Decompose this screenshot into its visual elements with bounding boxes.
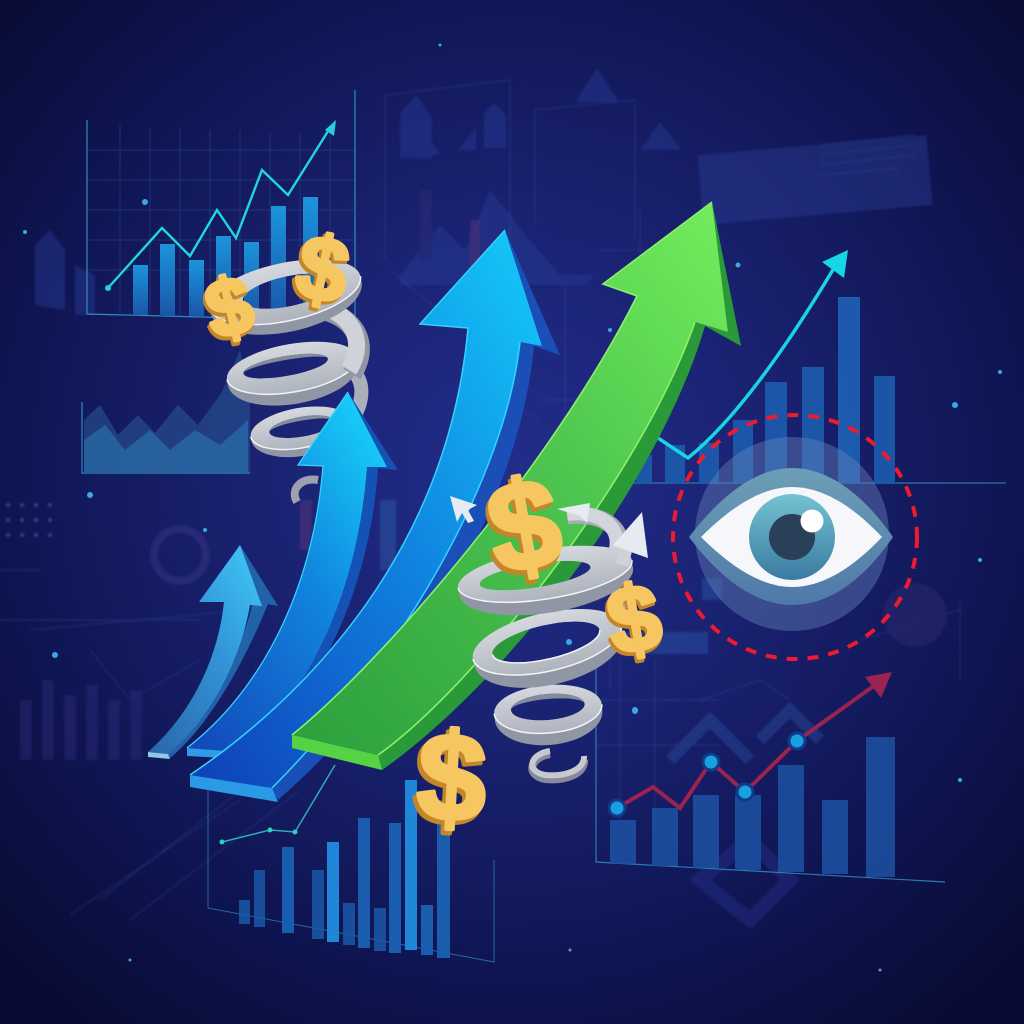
- dollar sign: center large: $: [475, 454, 569, 605]
- chart: bottom-center bars: [208, 765, 494, 962]
- eye outer lid: [689, 468, 893, 605]
- spring: lower center: [454, 513, 638, 779]
- chart: top-left bars and cyan trend line: [87, 90, 355, 321]
- spring: upper left: [204, 248, 369, 502]
- eye white: [701, 487, 882, 587]
- dollar sign: upper right: $: [286, 219, 354, 326]
- dollar sign: bottom: $: [414, 707, 490, 849]
- dollar sign: bottom: $: [411, 711, 487, 853]
- dollar sign: right of spring: $: [598, 567, 667, 678]
- arrow: large blue: [190, 230, 560, 802]
- chart: bottom-right bars with red trend line: [596, 640, 945, 882]
- small white arrows around spring: [450, 496, 648, 558]
- dollar sign: upper left small: $: [196, 262, 260, 360]
- faint background charts: [0, 68, 960, 920]
- dollar sign: upper right: $: [289, 216, 357, 324]
- highlight: [800, 510, 824, 532]
- arrow: large green: [292, 202, 741, 770]
- arrow: medium blue: [187, 392, 398, 759]
- chart: right bars with cyan arrow: [600, 250, 1006, 483]
- arrow: small light blue: [148, 545, 278, 759]
- chart: mountain area: [82, 350, 250, 473]
- dollar sign: upper left small: $: [197, 259, 262, 357]
- pupil: [769, 514, 815, 560]
- iris: [749, 494, 835, 580]
- dollar sign: right of spring: $: [600, 563, 669, 675]
- eye in dashed red circle: [673, 415, 917, 659]
- dollar sign: center large: $: [478, 450, 571, 601]
